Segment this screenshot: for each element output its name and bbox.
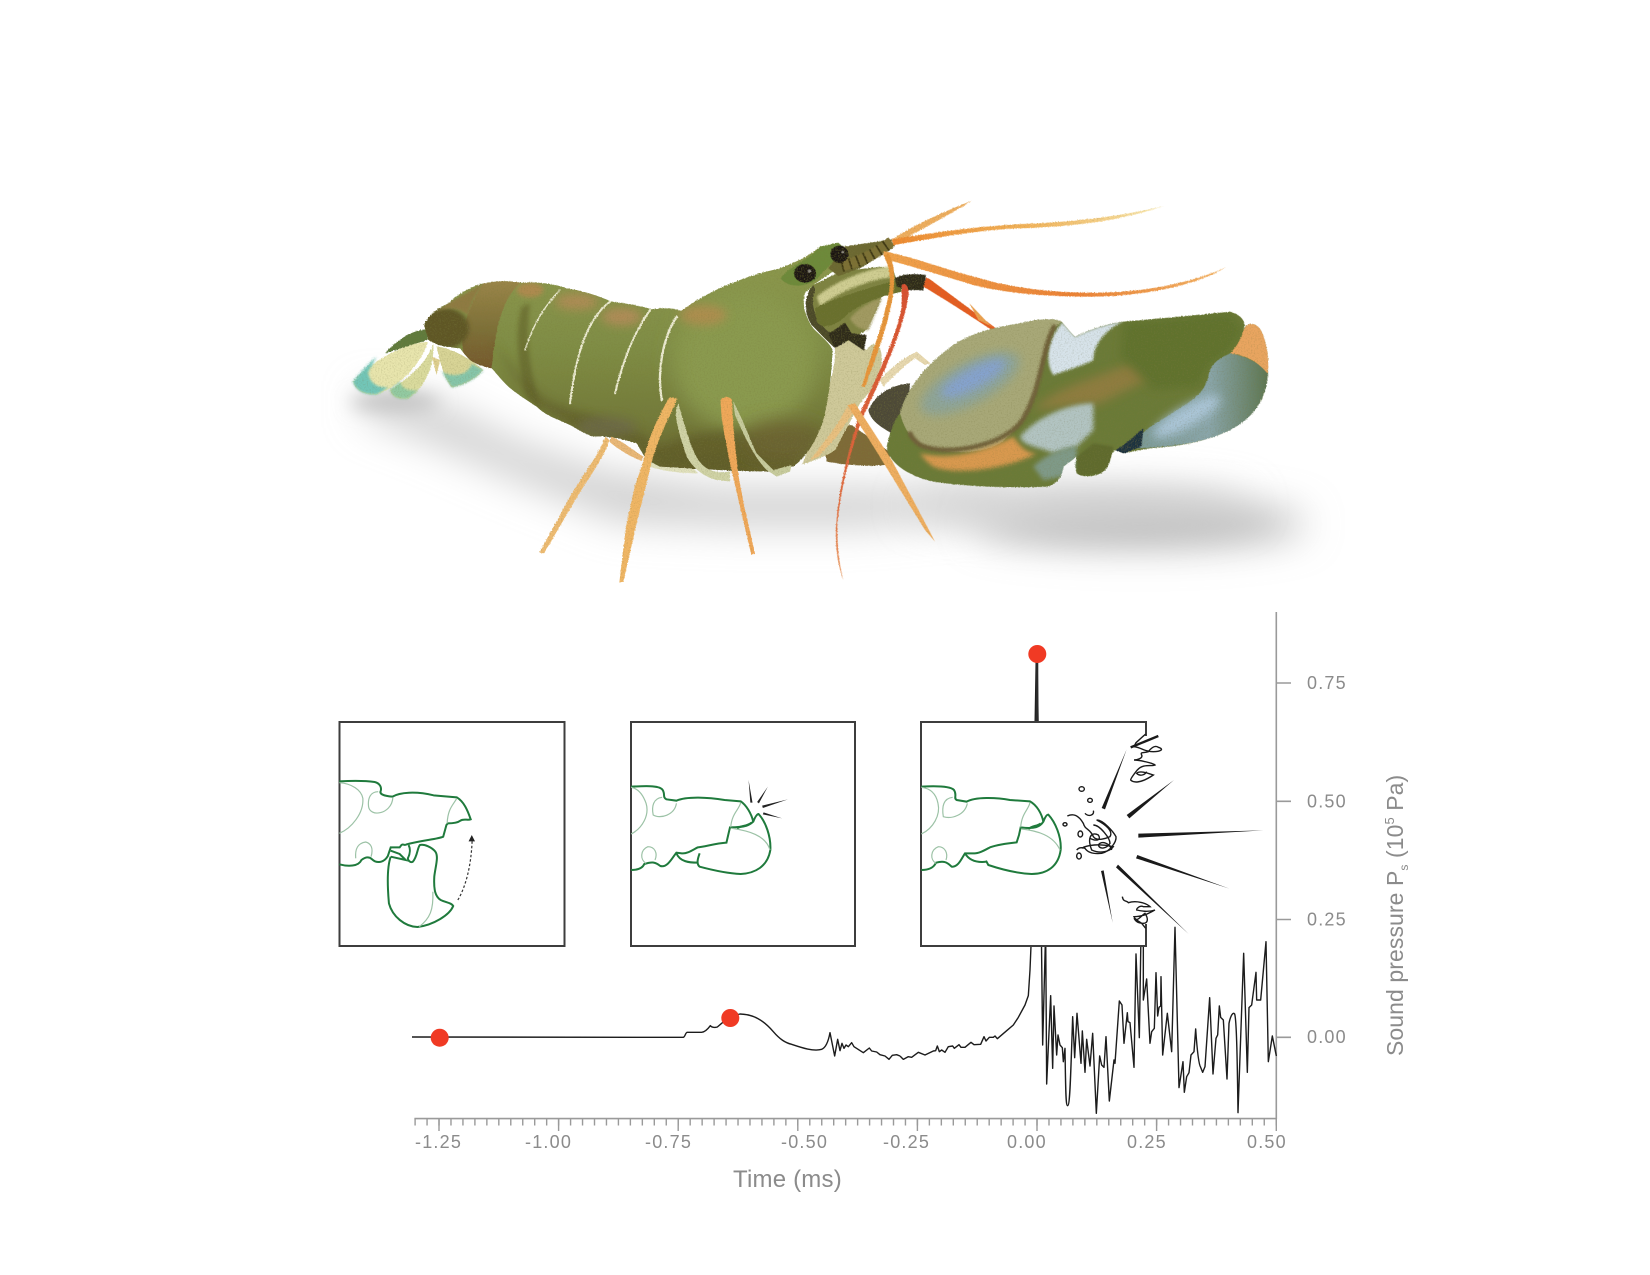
- panel 3 border: [921, 722, 1146, 946]
- illustration: snapping shrimp: [350, 201, 1305, 583]
- x axis labels: -1.25: [415, 1132, 462, 1152]
- time point marker: peak pressure: [1028, 645, 1046, 663]
- x axis labels: -0.75: [645, 1132, 692, 1152]
- x axis: [414, 1118, 1277, 1131]
- open claw drawing: [339, 781, 471, 927]
- x axis major ticks: [439, 1118, 1276, 1131]
- y axis labels: [1307, 673, 1347, 1047]
- panel 2: claw closed with small snap: [631, 722, 855, 946]
- body group: [420, 240, 837, 583]
- small burst lines: [749, 780, 788, 818]
- small walking leg: [880, 352, 931, 387]
- x axis labels: -1.00: [525, 1132, 572, 1152]
- y axis title: s: [1397, 864, 1411, 871]
- y axis title: Pa): [1382, 775, 1408, 817]
- antennular peduncle: [842, 242, 892, 266]
- x axis labels: 0.00: [1007, 1132, 1047, 1152]
- closed claw drawing: [631, 786, 770, 874]
- closed claw drawing: [921, 786, 1061, 874]
- y axis ticks: [1276, 683, 1291, 1037]
- third maxilliped knob and red-orange segment: [895, 274, 996, 330]
- shock wave rays: [1101, 749, 1263, 934]
- under thorax: [825, 425, 892, 466]
- y axis title: Sound pressure P: [1382, 871, 1408, 1056]
- upper scribbled water jet: [1131, 734, 1161, 782]
- shrimp cast shadow: [350, 392, 1305, 544]
- pressure trace: [412, 654, 1276, 1113]
- thoracic membrane: [802, 340, 882, 465]
- walking legs: [539, 397, 792, 583]
- red antenna: [836, 284, 909, 580]
- y axis: [1276, 612, 1291, 1119]
- time point marker: open claw: [431, 1029, 449, 1047]
- y axis title: 5: [1382, 817, 1397, 825]
- arrow: dactyl motion: [458, 835, 475, 900]
- eyes: [794, 246, 848, 283]
- panel 3: snap with cavitation burst: [921, 722, 1263, 946]
- panel 1: claw cocked open: [339, 722, 564, 946]
- snapping claw: [883, 310, 1273, 490]
- x axis labels: 0.50: [1247, 1132, 1287, 1152]
- y axis labels: 0.75: [1307, 673, 1347, 693]
- pale legs behind: [645, 460, 698, 473]
- chart: sound pressure over time: [412, 612, 1411, 1193]
- time point marker: claw closing: [721, 1009, 739, 1027]
- x axis labels: 0.25: [1127, 1132, 1167, 1152]
- y axis labels: 0.25: [1307, 910, 1347, 930]
- y axis title: (10: [1382, 825, 1408, 864]
- head and front group: [781, 201, 1273, 580]
- x axis labels: -0.50: [781, 1132, 828, 1152]
- abdomen segment lines: [525, 290, 677, 403]
- x axis labels: -0.25: [883, 1132, 930, 1152]
- tail fan: [353, 329, 483, 399]
- y axis labels: 0.50: [1307, 792, 1347, 812]
- lower scribbled water jet: [1122, 897, 1155, 928]
- x axis labels: [415, 1132, 1287, 1152]
- cavitation bubble collapse squiggles: [1063, 787, 1116, 859]
- body: abdomen and carapace: [420, 240, 837, 480]
- shrimp painting: [353, 201, 1273, 583]
- x axis title: Time (ms): [733, 1166, 842, 1193]
- underside group: [802, 340, 931, 466]
- antennae: [862, 201, 1226, 387]
- y axis labels: 0.00: [1307, 1027, 1347, 1047]
- dark joint block: [868, 383, 910, 433]
- x axis minor ticks: [414, 1118, 1277, 1126]
- rear body group: [353, 329, 483, 399]
- front walking leg: [810, 403, 935, 542]
- head and antennal scale: [781, 239, 902, 351]
